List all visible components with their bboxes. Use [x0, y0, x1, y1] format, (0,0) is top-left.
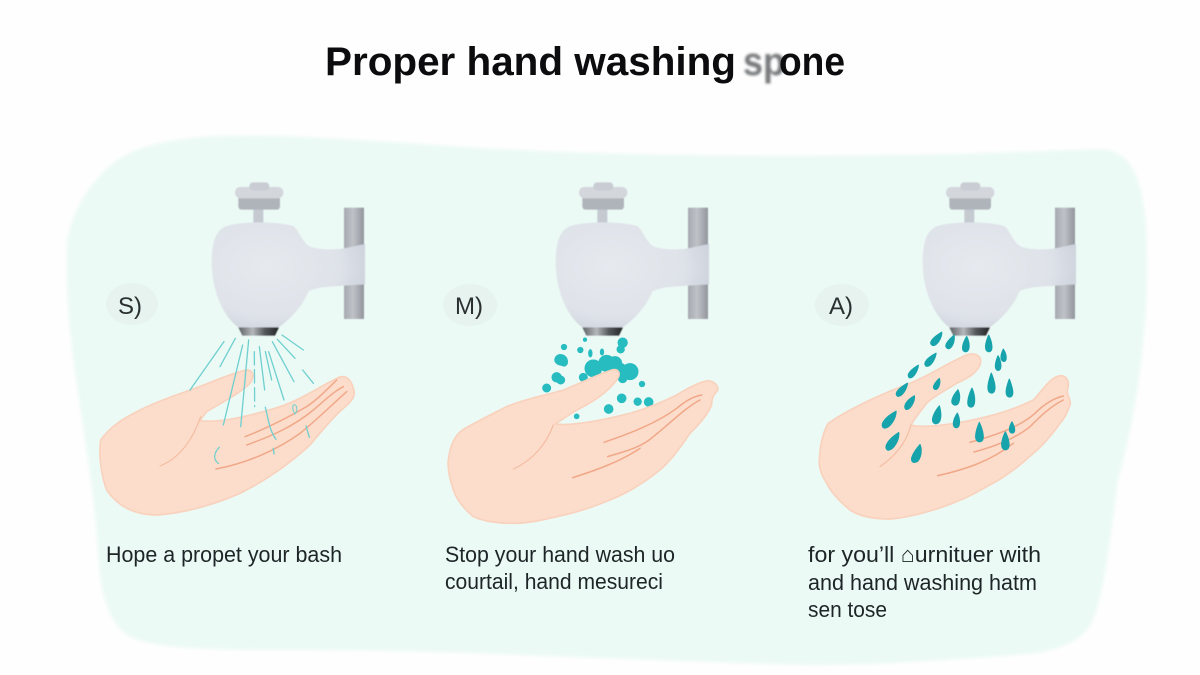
- water drops A: [882, 332, 1015, 462]
- caption A: [808, 542, 1041, 622]
- panel: step S: [100, 182, 365, 567]
- faucet M: [556, 182, 709, 336]
- caption M: [445, 542, 675, 594]
- soap foam M: [543, 338, 653, 419]
- caption A: for you’ll ⌂urnituer with: [808, 542, 1041, 567]
- hand S: [100, 335, 354, 515]
- caption M: Stop your hand wash uo: [445, 542, 675, 567]
- background panel: [66, 136, 1147, 665]
- panel: step A: [808, 182, 1076, 622]
- panel: step M: [443, 182, 718, 594]
- label M: M): [455, 293, 483, 320]
- caption A: and hand washing hatm: [808, 570, 1037, 595]
- label A: [815, 284, 869, 326]
- faucet A: [923, 182, 1076, 336]
- title: one: [779, 40, 845, 84]
- water spray S: [190, 335, 313, 463]
- caption M: courtail, hand mesureci: [445, 569, 663, 594]
- caption A: sen tose: [808, 597, 887, 622]
- title: Proper hand washing: [325, 40, 736, 84]
- title: sp: [743, 40, 785, 84]
- label S: [106, 283, 158, 325]
- label A: A): [829, 293, 853, 320]
- faucet S: [212, 182, 365, 336]
- hand A: [819, 332, 1070, 519]
- label S: S): [118, 293, 142, 320]
- hand M: [448, 370, 718, 523]
- caption S: Hope a propet your bash: [106, 542, 342, 567]
- label M: [443, 284, 497, 326]
